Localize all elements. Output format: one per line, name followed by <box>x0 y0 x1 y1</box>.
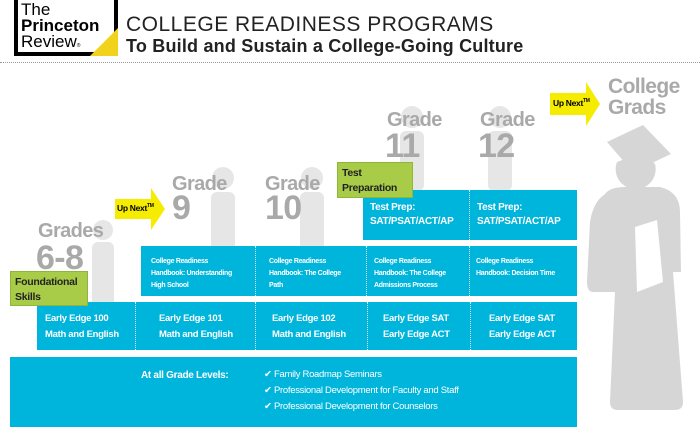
label: foundational skills: Foundational <box>15 276 77 288</box>
text: Grade <box>387 109 442 131</box>
row: handbooks: College Readiness <box>269 258 326 265</box>
row: early edge: Math and English <box>45 329 119 340</box>
row: handbooks: Handbook: Decision Time <box>476 270 555 277</box>
row: early edge: Early Edge 102 <box>272 313 335 324</box>
text: 10 <box>265 189 302 227</box>
row: handbooks: Admissions Process <box>374 282 437 289</box>
panel: all grade levels: ✔ Family Roadmap Seminars <box>264 369 382 380</box>
row: early edge: Early Edge SAT <box>383 313 449 324</box>
text: Grade <box>480 109 535 131</box>
row: handbooks: Handbook: The College <box>269 270 341 277</box>
title: COLLEGE READINESS PROGRAMS <box>126 13 494 36</box>
label: test preparation: Test <box>342 167 362 179</box>
row: early edge: Early Edge ACT <box>383 329 450 340</box>
label: test preparation <box>337 162 413 198</box>
panel: all grade levels: ✔ Professional Development for Faculty and Staff <box>264 385 459 396</box>
text: College <box>608 75 680 98</box>
text: 11 <box>385 127 420 165</box>
panel: all grade levels: ✔ Professional Development for Counselors <box>264 401 438 412</box>
panel: all grade levels <box>10 357 577 427</box>
row: early edge: Early Edge 101 <box>159 313 222 324</box>
row: test prep: Test Prep: <box>370 202 415 213</box>
row: early edge: Early Edge ACT <box>489 329 556 340</box>
text: 9 <box>172 189 190 227</box>
row: test prep <box>363 190 577 240</box>
arrow: up next 2: Up NextTM <box>553 98 590 108</box>
row: early edge: Early Edge SAT <box>489 313 555 324</box>
graduate icon <box>587 125 683 410</box>
panel: all grade levels: At all Grade Levels: <box>141 370 228 381</box>
row: test prep: SAT/PSAT/ACT/AP <box>370 216 453 227</box>
row: handbooks: College Readiness <box>476 258 533 265</box>
row: early edge: Math and English <box>159 329 233 340</box>
text: 6-8 <box>36 239 83 277</box>
arrow: up next 1 <box>115 188 165 230</box>
row: test prep: Test Prep: <box>477 202 522 213</box>
subtitle: To Build and Sustain a College-Going Culture <box>126 36 523 56</box>
row: handbooks: Handbook: The College <box>374 270 446 277</box>
arrow: up next 2 <box>550 82 600 126</box>
row: early edge: Math and English <box>272 329 346 340</box>
row: handbooks: College Readiness <box>151 258 208 265</box>
arrow: up next 1: Up NextTM <box>117 203 154 213</box>
logo: Princeton <box>21 16 99 35</box>
logo: The <box>21 0 50 19</box>
text: Grads <box>608 96 666 119</box>
row: handbooks: College Readiness <box>374 258 431 265</box>
label: test preparation: Preparation <box>342 182 397 194</box>
logo <box>14 0 118 56</box>
row: early edge <box>37 302 577 350</box>
text: Grade <box>265 173 320 195</box>
row: handbooks <box>141 246 577 296</box>
row: handbooks: Path <box>269 282 283 289</box>
label: foundational skills: Skills <box>15 291 41 303</box>
row: test prep: SAT/PSAT/ACT/AP <box>477 216 560 227</box>
figures (silhouettes) <box>92 106 512 302</box>
text: Grade <box>172 173 227 195</box>
logo: Review® <box>21 32 80 51</box>
row: handbooks: High School <box>151 282 189 289</box>
row: handbooks: Handbook: Understanding <box>151 270 232 277</box>
row: early edge: Early Edge 100 <box>45 313 108 324</box>
text: 12 <box>478 127 515 165</box>
grade labels: Grades <box>38 220 103 242</box>
label: foundational skills <box>10 271 88 306</box>
